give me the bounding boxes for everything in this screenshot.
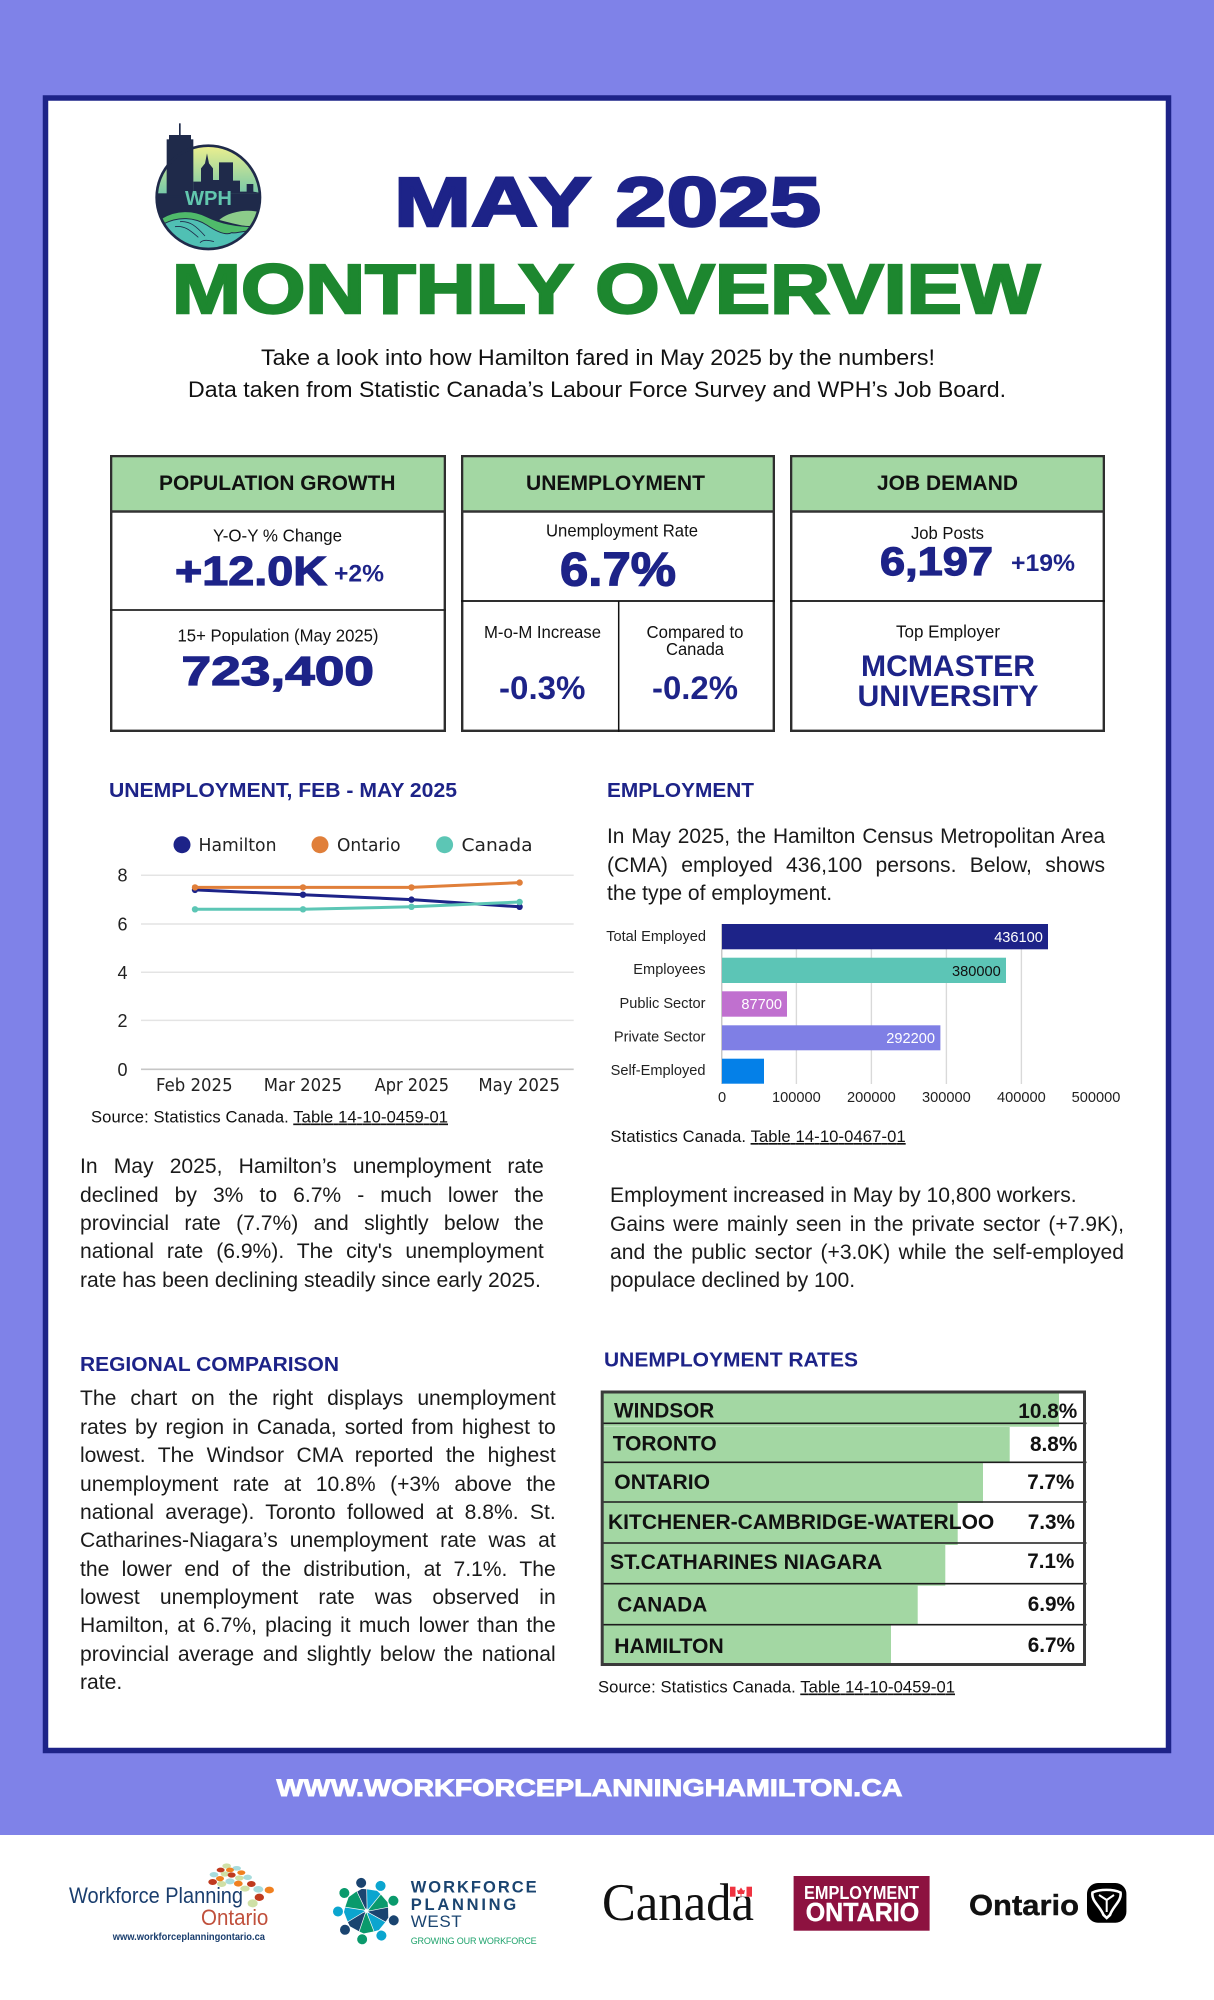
- source: bar chart: Statistics Canada. Table 14-10-0467-01: [610, 1127, 906, 1146]
- line chart: unemployment Feb to May 2025: 6: [117, 914, 128, 934]
- table chart: regional unemployment rates: 6.7%: [1028, 1634, 1075, 1657]
- panel: unemployment: Canada: [666, 639, 724, 659]
- panel: unemployment: Compared to: [646, 622, 744, 642]
- title: Monthly Overview: MONTHLY OVERVIEW: [172, 250, 1040, 328]
- panel: population growth: [110, 456, 446, 731]
- panel: job demand: 6,197: [880, 540, 993, 584]
- logo: WPH skyline: [153, 123, 263, 250]
- panel: population growth: 723,400: [182, 648, 374, 694]
- bar chart: employment by type: 200000: [847, 1090, 896, 1106]
- website url: WWW.WORKFORCEPLANNINGHAMILTON.CA: [276, 1775, 903, 1802]
- text block: employment intro: (CMA) employed 436,100 persons. Below, shows: [607, 854, 1105, 877]
- bar chart: employment by type: Total Employed: [606, 929, 706, 945]
- bar chart: employment by type: 100000: [772, 1090, 821, 1106]
- title: May 2025: MAY 2025: [394, 163, 821, 241]
- text block: employment intro: [607, 825, 1105, 905]
- table chart: regional unemployment rates: 8.8%: [1030, 1433, 1078, 1456]
- intro text: Take a look into how Hamilton fared in May 2025 by the numbers!: [261, 345, 935, 370]
- logo: Workforce Planning West: PLANNING: [411, 1896, 516, 1914]
- table chart: regional unemployment rates: HAMILTON: [614, 1635, 724, 1658]
- intro text: [188, 345, 1006, 402]
- bar chart: employment by type: 380000: [952, 964, 1001, 980]
- text block: employment change: and the public sector (+3.0K) while the self-employed: [610, 1241, 1124, 1264]
- bar chart: employment by type: 87700: [741, 997, 782, 1013]
- panel: job demand: [790, 456, 1105, 731]
- intro text: Data taken from Statistic Canada’s Labour Force Survey and WPH’s Job Board.: [188, 377, 1006, 402]
- main white frame: [46, 98, 1168, 1750]
- text block: employment change: Gains were mainly seen in the private sector (+7.9K),: [610, 1213, 1124, 1236]
- panel: job demand: JOB DEMAND: [877, 472, 1018, 495]
- text block: unemployment summary: [80, 1155, 544, 1292]
- table chart: regional unemployment rates: 10.8%: [1018, 1400, 1078, 1423]
- panel: population growth: +12.0K: [175, 548, 327, 594]
- source: table chart: Source: Statistics Canada. Table 14-10-0459-01: [598, 1678, 955, 1696]
- line chart: unemployment Feb to May 2025: Mar 2025: [264, 1076, 342, 1096]
- logo: Employment Ontario: EMPLOYMENT: [804, 1882, 920, 1903]
- panel: unemployment: [461, 456, 775, 732]
- heading: regional comparison: REGIONAL COMPARISON: [80, 1353, 339, 1376]
- text block: regional comparison: unemployment rate at 10.8% (+3% above the: [80, 1473, 556, 1496]
- logo: Employment Ontario: ONTARIO: [806, 1897, 919, 1927]
- panel: population growth: POPULATION GROWTH: [159, 472, 396, 495]
- line chart: unemployment Feb to May 2025: Ontario: [337, 836, 401, 856]
- panel: unemployment: 6.7%: [560, 542, 676, 596]
- bar chart: employment by type: 292200: [886, 1031, 935, 1047]
- text block: unemployment summary: rate has been declining steadily since early 2025.: [80, 1269, 541, 1292]
- bar chart: employment by type: Private Sector: [614, 1030, 706, 1046]
- table chart: regional unemployment rates: ONTARIO: [614, 1471, 710, 1494]
- panel: job demand: +19%: [1011, 550, 1075, 577]
- bar chart: employment by type: 400000: [997, 1090, 1046, 1106]
- text block: unemployment summary: provincial rate (7.7%) and slightly below the: [80, 1212, 544, 1235]
- table chart: regional unemployment rates: ST.CATHARINES NIAGARA: [610, 1551, 882, 1574]
- text block: employment intro: the type of employment.: [607, 882, 832, 905]
- bar chart: employment by type: 0: [718, 1090, 726, 1106]
- table chart: regional unemployment rates: TORONTO: [613, 1433, 717, 1456]
- panel: job demand: Job Posts: [911, 523, 984, 543]
- heading: unemployment trend: UNEMPLOYMENT, FEB - MAY 2025: [109, 779, 457, 802]
- panel: job demand: UNIVERSITY: [858, 680, 1038, 713]
- table chart: regional unemployment rates: KITCHENER-CAMBRIDGE-WATERLOO: [608, 1511, 994, 1534]
- logo: Workforce Planning West: [333, 1877, 537, 1946]
- logo: Ontario: [969, 1883, 1126, 1923]
- line chart: unemployment Feb to May 2025: 8: [117, 866, 128, 886]
- line chart: unemployment Feb to May 2025: Feb 2025: [156, 1076, 233, 1096]
- text block: unemployment summary: declined by 3% to 6.7% - much lower the: [80, 1184, 544, 1207]
- text block: regional comparison: the lower end of the distribution, at 7.1%. The: [80, 1558, 556, 1581]
- logo: Workforce Planning Ontario: [69, 1863, 274, 1943]
- logo: Ontario: Ontario: [969, 1890, 1079, 1922]
- line chart: unemployment Feb to May 2025: 2: [117, 1011, 128, 1031]
- logo: Workforce Planning West: WEST: [411, 1912, 462, 1931]
- bar chart: employment by type: 500000: [1072, 1090, 1120, 1106]
- heading: employment: EMPLOYMENT: [607, 779, 754, 802]
- logo: Canada wordmark: Canada: [602, 1874, 754, 1932]
- line chart: unemployment Feb to May 2025: Apr 2025: [375, 1076, 449, 1096]
- bar chart: employment by type: 436100: [994, 930, 1043, 946]
- text block: employment intro: In May 2025, the Hamilton Census Metropolitan Area: [607, 825, 1105, 848]
- logo: Workforce Planning West: GROWING OUR WORKFORCE: [411, 1936, 537, 1946]
- table chart: regional unemployment rates: CANADA: [617, 1593, 707, 1616]
- panel: unemployment: -0.3%: [499, 670, 586, 706]
- panel: unemployment: M-o-M Increase: [484, 622, 601, 642]
- text block: employment change: populace declined by 100.: [610, 1269, 855, 1292]
- text block: regional comparison: rates by region in Canada, sorted from highest to: [80, 1416, 556, 1439]
- text block: regional comparison: The chart on the right displays unemployment: [80, 1387, 556, 1410]
- panel: unemployment: UNEMPLOYMENT: [526, 472, 705, 495]
- logo: WPH skyline: WPH: [185, 188, 232, 210]
- text block: regional comparison: rate.: [80, 1671, 122, 1694]
- panel: unemployment: Unemployment Rate: [546, 520, 698, 540]
- logo: Workforce Planning Ontario: www.workforceplanningontario.ca: [112, 1932, 265, 1943]
- line chart: unemployment Feb to May 2025: Hamilton: [198, 836, 276, 856]
- bar chart: employment by type: Self-Employed: [611, 1063, 706, 1079]
- panel: population growth: Y-O-Y % Change: [213, 526, 342, 546]
- line chart: unemployment Feb to May 2025: May 2025: [478, 1076, 560, 1096]
- table chart: regional unemployment rates: 7.3%: [1028, 1511, 1075, 1534]
- text block: unemployment summary: national rate (6.9%). The city's unemployment: [80, 1240, 544, 1263]
- table chart: regional unemployment rates: [601, 1392, 1086, 1665]
- table chart: regional unemployment rates: 7.1%: [1027, 1550, 1075, 1573]
- line chart: unemployment Feb to May 2025: 0: [117, 1060, 128, 1080]
- text block: employment change: Employment increased in May by 10,800 workers.: [610, 1184, 1077, 1207]
- text block: regional comparison: [80, 1387, 556, 1694]
- panel: population growth: +2%: [334, 560, 384, 588]
- text block: regional comparison: Hamilton, at 6.7%, placing it much lower than the: [80, 1614, 556, 1637]
- text block: regional comparison: Catharines-Niagara’s unemployment rate was at: [80, 1529, 556, 1552]
- bar chart: employment by type: Public Sector: [620, 996, 706, 1012]
- text block: regional comparison: provincial average and slightly below the national: [80, 1643, 556, 1666]
- heading: unemployment rates: UNEMPLOYMENT RATES: [604, 1348, 858, 1372]
- bar chart: employment by type: Employees: [633, 962, 706, 978]
- text block: regional comparison: lowest unemployment rate was observed in: [80, 1586, 556, 1609]
- text block: regional comparison: national average). Toronto followed at 8.8%. St.: [80, 1501, 556, 1524]
- table chart: regional unemployment rates: WINDSOR: [614, 1399, 714, 1422]
- text block: unemployment summary: In May 2025, Hamilton’s unemployment rate: [80, 1155, 544, 1178]
- line chart: unemployment Feb to May 2025: [117, 836, 574, 1096]
- table chart: regional unemployment rates: 7.7%: [1027, 1471, 1075, 1494]
- logo: Workforce Planning Ontario: Workforce Planning: [69, 1883, 243, 1908]
- bar chart: employment by type: [606, 924, 1120, 1106]
- text block: regional comparison: lowest. The Windsor CMA reported the highest: [80, 1444, 556, 1467]
- panel: job demand: Top Employer: [896, 622, 1000, 642]
- logo: Workforce Planning Ontario: Ontario: [201, 1905, 268, 1930]
- panel: unemployment: -0.2%: [652, 670, 738, 706]
- bar chart: employment by type: 300000: [922, 1090, 971, 1106]
- panel: job demand: MCMASTER: [861, 650, 1035, 683]
- table chart: regional unemployment rates: 6.9%: [1028, 1593, 1075, 1616]
- text block: employment change: [610, 1184, 1124, 1292]
- source: line chart: Source: Statistics Canada. Table 14-10-0459-01: [91, 1108, 448, 1126]
- logo: Employment Ontario: [794, 1876, 930, 1931]
- line chart: unemployment Feb to May 2025: 4: [117, 963, 128, 983]
- line chart: unemployment Feb to May 2025: Canada: [462, 836, 532, 856]
- panel: population growth: 15+ Population (May 2025): [178, 626, 378, 646]
- logo: Workforce Planning West: WORKFORCE: [411, 1879, 537, 1897]
